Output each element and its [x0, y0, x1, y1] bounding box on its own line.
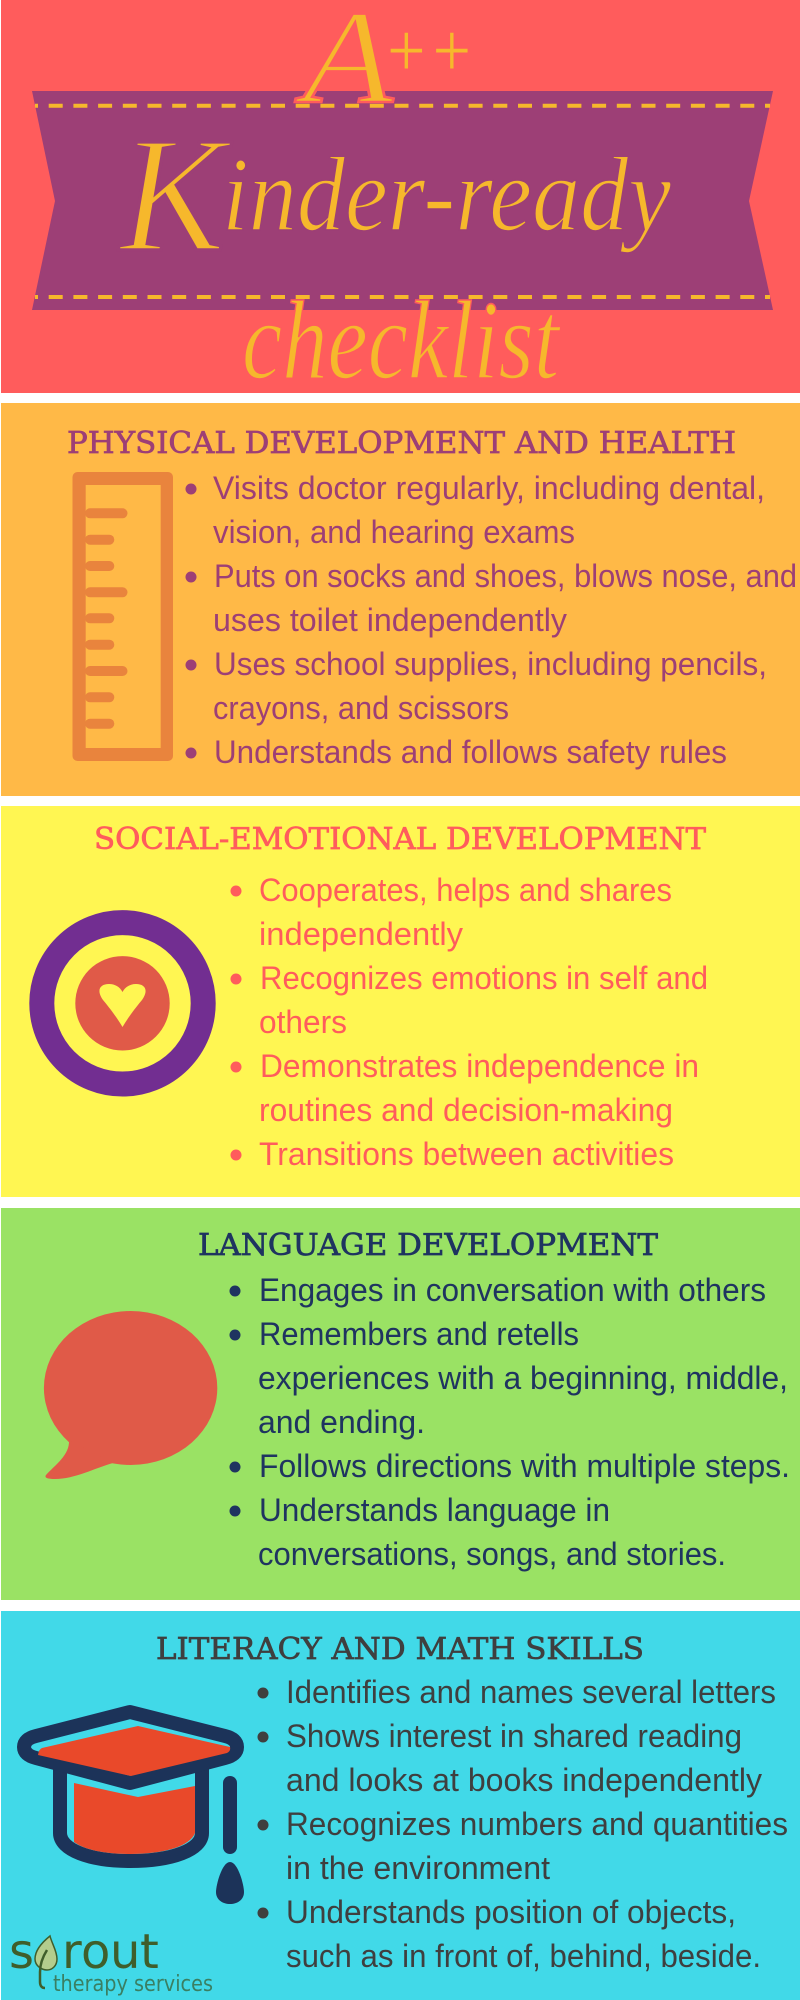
bullet: understands language: Understands language in: [259, 1492, 610, 1528]
checklist: physical: [186, 470, 797, 770]
bullet: position: [258, 1894, 761, 1974]
heading: physical development: PHYSICAL DEVELOPMENT AND HEALTH: [67, 426, 736, 461]
logo: sprout therapy services: [9, 1924, 213, 1997]
title: checklist: checklist: [242, 279, 561, 403]
bullet: conversation: Engages in conversation with others: [259, 1272, 766, 1308]
panel: social-emotional development: [1, 806, 800, 1197]
bullet: retells: and ending.: [258, 1404, 425, 1440]
bullet: doctor visits: Visits doctor regularly, including dental,: [213, 470, 765, 506]
title: A++: ++: [383, 9, 474, 93]
checklist: literacy and math: [258, 1674, 788, 1974]
logo: sprout therapy services: sprout: [9, 1924, 159, 1980]
bullet: retells: experiences with a beginning, middle,: [258, 1360, 788, 1396]
panel: literacy and math skills: [1, 1611, 800, 2000]
bullet: cooperates: [230, 872, 672, 952]
bullet: cooperates: independently: [259, 916, 463, 952]
bullet: doctor visits: [186, 470, 765, 550]
logo: sprout therapy services: therapy services: [53, 1972, 213, 1997]
icon: heart target: [42, 923, 203, 1084]
bullet: letters: Identifies and names several letters: [286, 1674, 776, 1710]
bullet: self care: uses toilet independently: [213, 602, 567, 638]
heading: social-emotional: SOCIAL-EMOTIONAL DEVELOPMENT: [94, 822, 706, 857]
title: A++: [294, 0, 474, 131]
bullet: transitions: Transitions between activities: [259, 1136, 674, 1172]
title: Kinder-ready: K: [118, 103, 233, 286]
bullet: school supplies: [186, 646, 767, 726]
bullet: self care: [186, 558, 797, 638]
bullet: reading: Shows interest in shared reading: [286, 1718, 742, 1754]
bullet: safety rules: Understands and follows safety rules: [214, 734, 727, 770]
bullet: emotions: [230, 960, 708, 1040]
bullet: retells: [230, 1316, 788, 1440]
heading: language: LANGUAGE DEVELOPMENT: [198, 1228, 658, 1263]
icon: ruler: [72, 472, 173, 761]
bullet: position: such as in front of, behind, beside.: [286, 1938, 761, 1974]
bullet: independence: routines and decision-making: [259, 1092, 673, 1128]
bullet: position: Understands position of objects,: [286, 1894, 736, 1930]
title: Kinder-ready: inder-ready: [222, 136, 672, 253]
bullet: emotions: Recognizes emotions in self and: [260, 960, 708, 996]
bullet: numbers: in the environment: [286, 1850, 550, 1886]
bullet: directions: Follows directions with multiple steps.: [259, 1448, 790, 1484]
bullet: understands language: [230, 1492, 726, 1572]
icon: speech bubble: [44, 1311, 217, 1479]
heading: literacy and math: LITERACY AND MATH SKILLS: [156, 1632, 644, 1667]
bullet: numbers: [258, 1806, 788, 1886]
bullet: numbers: Recognizes numbers and quantities: [286, 1806, 788, 1842]
panel: physical development and health: [1, 403, 800, 796]
bullet: retells: Remembers and retells: [259, 1316, 579, 1352]
bullet: reading: [258, 1718, 762, 1798]
panel: header: [1, 0, 800, 403]
checklist: social-emotional: [230, 872, 708, 1172]
bullet: school supplies: crayons, and scissors: [213, 690, 509, 726]
checklist: language: [230, 1272, 790, 1572]
bullet: independence: Demonstrates independence in: [260, 1048, 699, 1084]
panel: language development: [1, 1208, 800, 1600]
bullet: doctor visits: vision, and hearing exams: [213, 514, 575, 550]
bullet: independence: [230, 1048, 699, 1128]
icon: graduation cap: [24, 1712, 244, 1904]
bullet: school supplies: Uses school supplies, including pencils,: [214, 646, 767, 682]
bullet: cooperates: Cooperates, helps and shares: [259, 872, 672, 908]
bullet: emotions: others: [259, 1004, 347, 1040]
bullet: reading: and looks at books independently: [286, 1762, 762, 1798]
bullet: understands language: conversations, songs, and stories.: [258, 1536, 726, 1572]
banner ribbon: [32, 91, 773, 310]
